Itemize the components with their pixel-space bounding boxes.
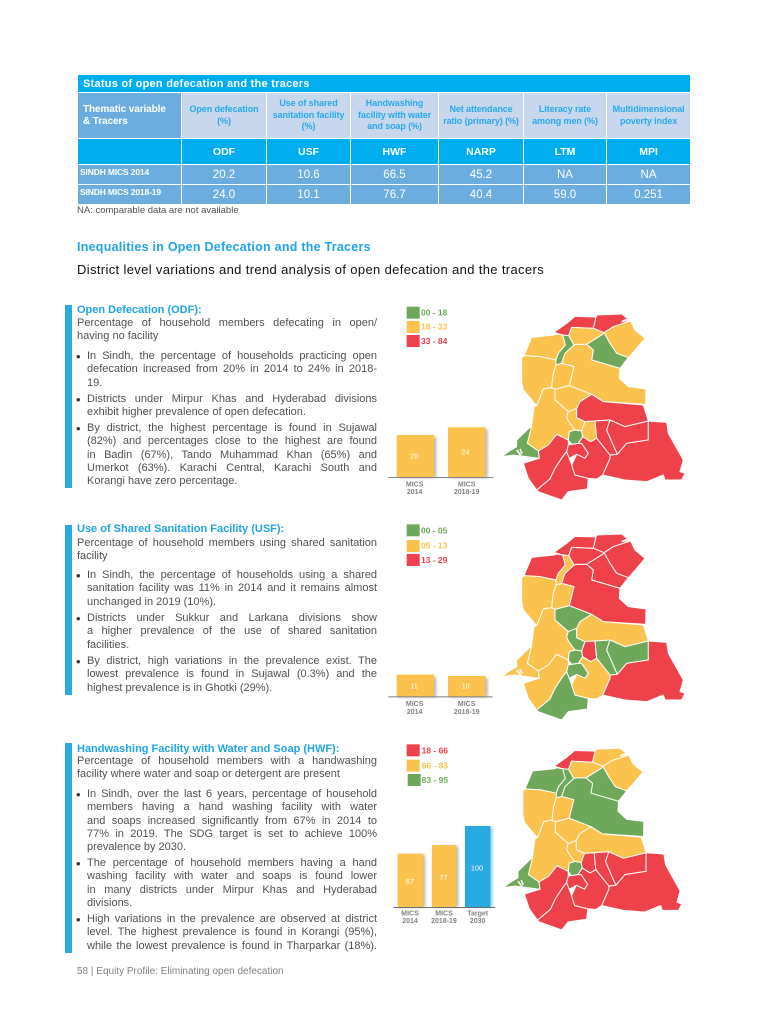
bullet: USF divisions: Districts under Sukkur and Larkana divisions show — [87, 612, 377, 624]
bullet: ODF districts: Umerkot (63%). Karachi Central, Karachi South and — [87, 462, 377, 474]
bar chart: USF — [388, 675, 493, 716]
table: status of open defecation and the tracers: Multidimensional — [613, 104, 684, 114]
bar chart: ODF: 20 — [410, 452, 418, 461]
bar chart: USF: MICS — [406, 701, 424, 708]
definition: ODF: having no facility — [77, 330, 158, 342]
bullet: HWF trend: In Sindh, over the last 6 years, percentage of household — [87, 788, 377, 800]
bar chart: USF: 2018-19 — [454, 709, 480, 716]
table: status of open defecation and the tracers: 0.251 — [634, 188, 663, 200]
legend: ODF: 18 - 33 — [421, 323, 448, 332]
bar chart: USF: 10 — [462, 681, 470, 690]
table: status of open defecation and the tracers: 66.5 — [383, 168, 406, 180]
legend: HWF: 18 - 66 — [422, 747, 449, 756]
bullet: USF trend: unchanged in 2019 (10%). — [87, 596, 216, 608]
table: status of open defecation and the tracers: 76.7 — [383, 188, 406, 200]
table: status of open defecation and the tracers: NA — [557, 168, 573, 180]
bullet: ODF trend: In Sindh, the percentage of households practicing open — [87, 350, 377, 362]
table: status of open defecation and the tracers: 10.6 — [297, 168, 320, 180]
bar chart: HWF: MICS — [435, 910, 453, 917]
bar chart: USF: 2014 — [407, 709, 423, 716]
bar chart: HWF: 67 — [406, 877, 414, 886]
bar chart: HWF: 2018-19 — [431, 918, 457, 925]
bar chart: USF: MICS — [458, 701, 476, 708]
bullet: HWF trend: prevalence by 2030. — [87, 841, 186, 853]
table: status of open defecation and the tracers: (%) — [302, 121, 315, 131]
bullet: HWF divisions — [87, 857, 377, 910]
table: status of open defecation and the tracers: Open defecation — [189, 104, 258, 114]
legend: ODF — [407, 307, 448, 347]
bar chart: HWF: 77 — [439, 873, 447, 882]
bar chart: ODF: MICS — [458, 481, 476, 488]
definition: HWF — [77, 755, 377, 780]
bullet: ODF trend — [87, 350, 377, 390]
bullet: HWF districts: High variations in the prevalence are observed at district — [87, 913, 377, 925]
bullet: USF trend: In Sindh, the percentage of households using a shared — [87, 569, 377, 581]
table: status of open defecation and the tracers: 24.0 — [213, 188, 235, 200]
bullet: USF districts — [87, 655, 377, 695]
table: status of open defecation and the tracers: ratio (primary) (%) — [443, 116, 519, 126]
bullet: USF divisions — [87, 612, 377, 652]
legend: HWF — [407, 744, 449, 786]
definition: USF: Percentage of household members using shared sanitation — [77, 537, 377, 549]
legend: HWF: 66 - 83 — [422, 762, 449, 771]
table: status of open defecation and the tracers: SINDH MICS 2018-19 — [80, 187, 161, 197]
bullet: USF trend — [87, 569, 377, 609]
bullet: ODF districts: By district, the highest percentage is found in Sujawal — [87, 422, 377, 434]
legend: USF: 05 - 13 — [421, 542, 448, 551]
table: status of open defecation and the tracers — [78, 75, 690, 204]
table: status of open defecation and the tracers: 20.2 — [213, 168, 235, 180]
bullet: HWF divisions: washing facility with water and soaps is found lower — [87, 870, 377, 882]
bar chart: HWF: Target — [467, 910, 489, 917]
bullet: ODF districts: (82%) and percentages close to the highest are found — [87, 435, 377, 447]
heading: HWF: Handwashing Facility with Water and Soap (HWF): — [77, 743, 339, 755]
legend: USF — [407, 524, 448, 566]
bullet: ODF districts: Korangi have zero percentage. — [87, 475, 237, 487]
bullet: USF divisions: facilities. — [87, 639, 129, 651]
table note: NA: comparable data are not available — [77, 205, 239, 216]
panel: shared sanitation text — [65, 523, 377, 695]
definition: HWF: facility where water and soap or detergent are present — [77, 768, 340, 780]
heading: inequalities: Inequalities in Open Defecation and the Tracers — [77, 240, 371, 254]
bar chart: HWF: 2014 — [402, 918, 418, 925]
table: status of open defecation and the tracers: facility with water — [358, 110, 431, 120]
bullet: USF districts: By district, high variations in the prevalence exist. The — [87, 655, 377, 667]
bar chart: HWF — [393, 826, 495, 925]
bullet: HWF districts — [87, 913, 377, 953]
legend: USF: 00 - 05 — [421, 527, 448, 536]
panel: handwashing text — [65, 743, 377, 953]
bar chart: HWF: 2030 — [470, 918, 486, 925]
definition: HWF: Percentage of household members with a handwashing — [77, 755, 377, 767]
table: status of open defecation and the tracers: LTM — [555, 146, 575, 158]
bar chart: ODF — [388, 427, 493, 496]
heading: ODF: Open Defecation (ODF): — [77, 304, 202, 316]
heading: USF: Use of Shared Sanitation Facility (USF): — [77, 523, 284, 535]
panel: ODF graphics — [388, 306, 684, 500]
table: status of open defecation and the tracers: SINDH MICS 2014 — [80, 167, 149, 177]
bullet: ODF divisions: Districts under Mirpur Khas and Hyderabad divisions — [87, 393, 377, 405]
bullet: USF districts: lowest prevalence is found in Sujawal (0.3%) and the — [87, 668, 377, 680]
bullet: ODF districts: in Badin (67%), Tando Muhammad Khan (65%) and — [87, 449, 377, 461]
table: status of open defecation and the tracers: NA — [641, 168, 657, 180]
table: status of open defecation and the tracers: 59.0 — [554, 188, 576, 200]
bullet: ODF trend: defecation increased from 20% in 2014 to 24% in 2018- — [87, 363, 377, 375]
table: status of open defecation and the tracers: Net attendance — [449, 104, 513, 114]
bullet: ODF trend: 19. — [87, 377, 102, 389]
bullet: USF trend: sanitation facility was 11% in 2014 and it remains almost — [87, 582, 377, 594]
table: status of open defecation and the tracers: MPI — [639, 146, 658, 158]
legend: ODF: 00 - 18 — [421, 309, 448, 318]
definition: USF — [77, 537, 377, 562]
bullet: ODF divisions: exhibit higher prevalence of open defecation. — [87, 406, 306, 418]
bullet: HWF trend: and soaps increased significantly from 67% in 2014 to — [87, 815, 377, 827]
bullet: HWF districts: level. The highest prevalence is found in Korangi (95%), — [87, 926, 377, 938]
bar chart: ODF: MICS — [406, 481, 424, 488]
bullet: USF divisions: a higher prevalence of the use of shared sanitation — [87, 625, 377, 637]
panel: open defecation text — [65, 304, 377, 488]
legend: ODF: 33 - 84 — [421, 337, 448, 346]
definition: USF: facility — [77, 550, 108, 562]
table: status of open defecation and the tracers: Use of shared — [279, 98, 338, 108]
table: status of open defecation and the tracers: 45.2 — [470, 168, 492, 180]
map: USF by district — [502, 534, 685, 720]
bar chart: ODF: 2018-19 — [454, 489, 480, 496]
panel: USF graphics — [388, 524, 684, 720]
subheading: district level variations: District level variations and trend analysis of open defecation and the tracers — [77, 262, 544, 277]
bullet: HWF divisions: divisions. — [87, 897, 132, 909]
bullet: HWF trend: members having a hand washing facility with water — [87, 801, 377, 813]
table: status of open defecation and the tracers: NARP — [466, 146, 496, 158]
table: status of open defecation and the tracers: poverty index — [620, 116, 677, 126]
table: status of open defecation and the tracers: 40.4 — [470, 188, 492, 200]
table: status of open defecation and the tracers: & Tracers — [83, 116, 128, 126]
bullet: ODF divisions — [87, 393, 377, 420]
bullet: HWF trend — [87, 788, 377, 854]
bar chart: HWF: 100 — [471, 864, 483, 873]
legend: USF: 13 - 29 — [421, 556, 448, 565]
definition: ODF: Percentage of household members defecating in open/ — [77, 317, 377, 329]
table: status of open defecation and the tracers: Status of open defecation and the tracers — [83, 78, 310, 90]
table: status of open defecation and the tracers: HWF — [383, 146, 406, 158]
bullet: HWF divisions: in many districts under Mirpur Khas and Hyderabad — [87, 884, 377, 896]
table: status of open defecation and the tracers: ODF — [213, 146, 235, 158]
table: status of open defecation and the tracers: sanitation facility — [273, 110, 344, 120]
table: status of open defecation and the tracers: (%) — [217, 116, 231, 126]
map: HWF by district — [503, 748, 682, 930]
bar chart: ODF: 2014 — [407, 489, 423, 496]
table: status of open defecation and the tracers: Handwashing — [366, 98, 423, 108]
bar chart: HWF: MICS — [401, 910, 419, 917]
bullet: HWF trend: 77% in 2019. The SDG target is set to achieve 100% — [87, 828, 377, 840]
panel: HWF graphics — [393, 744, 682, 930]
table: status of open defecation and the tracers: 10.1 — [297, 188, 320, 200]
footer: 58 | Equity Profile: Eliminating open defecation — [77, 966, 284, 977]
bar chart: USF: 11 — [410, 682, 418, 691]
definition: ODF — [77, 317, 377, 342]
map: ODF by district — [502, 314, 685, 500]
table: status of open defecation and the tracers: among men (%) — [532, 116, 598, 126]
table: status of open defecation and the tracers: Thematic variable — [83, 104, 166, 114]
bullet: USF districts: highest prevalence is in Ghotki (29%). — [87, 682, 272, 694]
bullet: HWF districts: while the lowest prevalence is found in Tharparkar (18%). — [87, 940, 377, 952]
table: status of open defecation and the tracers: and soap (%) — [367, 121, 422, 131]
bar chart: ODF: 24 — [461, 448, 469, 457]
legend: HWF: 83 - 95 — [422, 776, 449, 785]
bullet: ODF districts — [87, 422, 377, 488]
bullet: HWF divisions: The percentage of household members having a hand — [87, 857, 377, 869]
table: status of open defecation and the tracers: Literacy rate — [539, 104, 591, 114]
table: status of open defecation and the tracers: USF — [298, 146, 319, 158]
